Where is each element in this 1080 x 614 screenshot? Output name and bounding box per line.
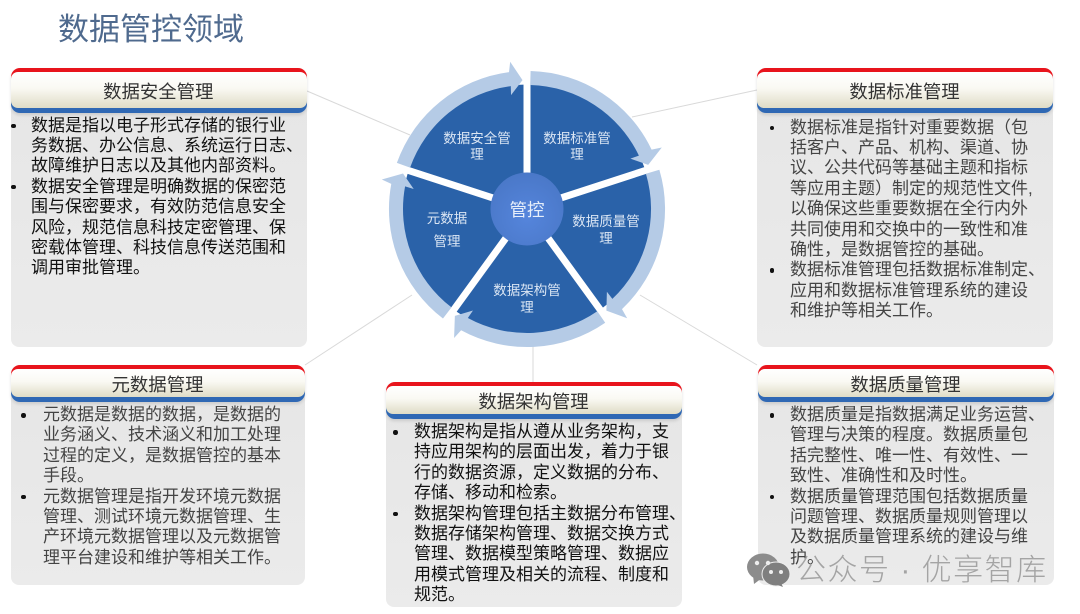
text block: 确性，是数据管控的基础。 [790, 240, 994, 259]
panel: 数据质量管理 [757, 365, 1055, 585]
text block: 数据标准管理包括数据标准制定、 [790, 260, 1045, 279]
text block: 和维护等相关工作。 [790, 301, 943, 320]
panel heading: 数据标准管理 [849, 80, 960, 102]
text block: 产环境元数据管理以及元数据管 [43, 527, 281, 546]
text block: 数据架构管理包括主数据分布管理、 [414, 504, 686, 523]
text block: 管理与决策的程度。数据质量包 [790, 425, 1028, 444]
text block: 理平台建设和维护等相关工作。 [43, 548, 281, 567]
text block [393, 422, 686, 604]
panel heading [758, 365, 1054, 402]
text block: 及数据质量管理系统的建设与维 [790, 527, 1028, 546]
white spokes [393, 68, 661, 323]
panel body [757, 88, 1053, 347]
sector labels: 理 [599, 231, 613, 246]
sector labels [427, 130, 640, 315]
sector labels: 理 [470, 147, 484, 162]
text block: 等应用主题）制定的规范性文件, [790, 179, 1033, 198]
text block: 致性、准确性和及时性。 [790, 466, 977, 485]
text block: 应用和数据标准管理系统的建设 [790, 281, 1028, 300]
panel: 数据安全管理 [10, 68, 308, 347]
text block: 围与保密要求，有效防范信息安全 [31, 197, 286, 216]
panel heading: 数据架构管理 [478, 391, 589, 412]
text block: 管理、测试环境元数据管理、生 [43, 507, 281, 526]
panel heading: 数据质量管理 [850, 374, 961, 395]
sector labels: 理 [570, 147, 584, 162]
text block: 务数据、办公信息、系统运行日志、 [31, 136, 303, 155]
text block: 数据标准是指针对重要数据（包 [790, 118, 1028, 136]
text block: 元数据是数据的数据，是数据的 [43, 405, 281, 424]
dark sector disk [402, 84, 652, 334]
panel heading [10, 68, 307, 112]
text block: 数据质量管理范围包括数据质量 [790, 487, 1028, 506]
hub [490, 172, 564, 246]
chart: 数据管控 circular diagram [382, 62, 665, 347]
sector labels: 数据安全管 [443, 130, 511, 146]
text block: 元数据管理是指开发环境元数据 [43, 487, 281, 506]
panel body [386, 400, 682, 607]
panel body [11, 383, 305, 585]
panel: 元数据管理 [10, 365, 306, 585]
panel heading [757, 68, 1053, 112]
sector labels: 数据标准管 [543, 131, 611, 146]
text block: 括客户、产品、机构、渠道、协 [790, 138, 1028, 157]
panel: 数据架构管理 [385, 382, 686, 607]
text block: 业务涵义、技术涵义和加工处理 [43, 425, 281, 444]
text block: 数据安全管理是明确数据的保密范 [31, 177, 286, 196]
text block: 管理、数据模型策略管理、数据应 [414, 544, 669, 563]
text block: 括完整性、唯一性、有效性、一 [790, 446, 1028, 465]
sector labels: 数据质量管 [572, 214, 640, 229]
text block: 问题管理、数据质量规则管理以 [790, 507, 1028, 526]
text block: 数据存储架构管理、数据交换方式 [414, 524, 669, 543]
panel heading: 元数据管理 [112, 374, 203, 395]
panel body [10, 88, 307, 347]
text block: 行的数据资源，定义数据的分布、 [414, 463, 669, 482]
panel heading: 数据安全管理 [103, 80, 213, 102]
sector labels: 管理 [434, 234, 461, 249]
text block [770, 118, 1045, 320]
sector labels: 理 [520, 300, 534, 315]
text block [21, 405, 281, 567]
panel heading [11, 365, 305, 402]
panel heading [386, 382, 682, 419]
text block: 调用审批管理。 [31, 258, 150, 277]
text block: 用模式管理及相关的流程、制度和 [414, 565, 669, 584]
text block [770, 405, 1045, 567]
panel: 数据标准管理 [756, 68, 1054, 347]
text block: 议、公共代码等基础主题和指标 [790, 158, 1028, 177]
text block: 密载体管理、科技信息传送范围和 [31, 238, 286, 257]
text block: 以确保这些重要数据在全行内外 [790, 199, 1028, 218]
text block: 风险，规范信息科技定密管理、保 [31, 218, 286, 237]
title: 数据管控领域 [58, 12, 244, 47]
text block: 手段。 [43, 466, 94, 485]
ring arrows [337, 38, 700, 400]
text block: 规范。 [414, 585, 465, 604]
panel body [758, 383, 1054, 585]
watermark text: 公众号 · 优享智库 [796, 554, 1048, 587]
text block [11, 116, 303, 277]
text block: 存储、移动和检索。 [414, 483, 567, 502]
text block: 共同使用和交换中的一致性和准 [790, 220, 1028, 239]
sector labels: 数据架构管 [493, 283, 561, 298]
text block: 故障维护日志以及其他内部资料。 [31, 156, 286, 175]
sector labels: 元数据 [427, 211, 467, 226]
text block: 数据质量是指数据满足业务运营、 [790, 405, 1045, 424]
text block: 数据架构是指从遵从业务架构，支 [414, 422, 669, 441]
text block: 护。 [790, 548, 824, 567]
text block: 持应用架构的层面出发，着力于银 [414, 442, 669, 461]
text block: 过程的定义，是数据管控的基本 [43, 446, 281, 465]
icon: wechat [747, 554, 790, 587]
hub: 管控 [510, 200, 544, 220]
text block: 数据是指以电子形式存储的银行业 [31, 116, 286, 134]
watermark [747, 554, 1048, 587]
